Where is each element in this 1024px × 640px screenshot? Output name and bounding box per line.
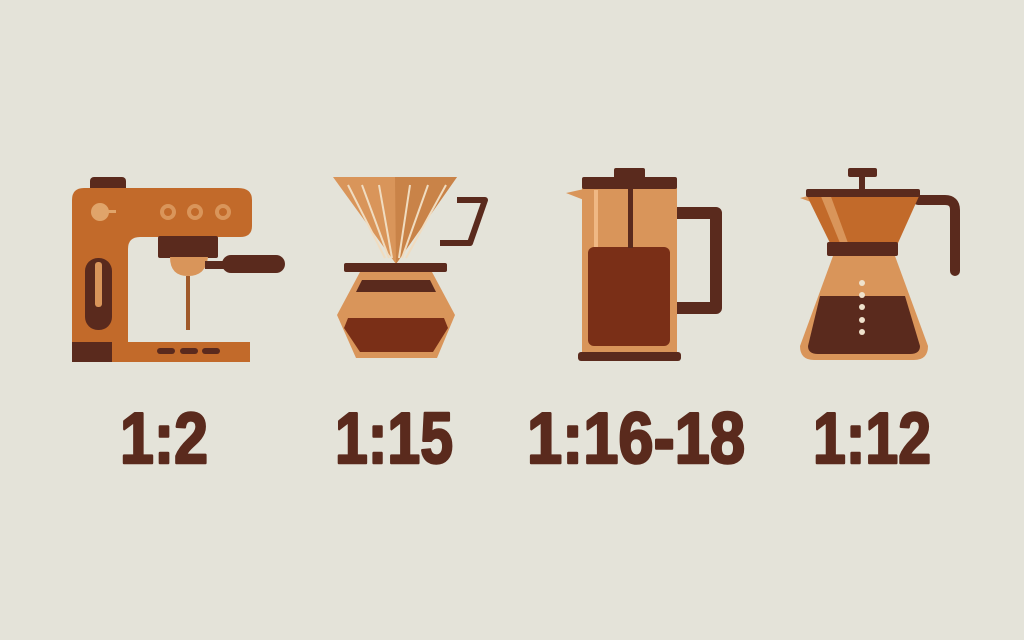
ratio: french press 1:16-18: 1:16-18 — [527, 399, 745, 479]
icon: french press — [566, 168, 716, 361]
icon: chemex pot — [800, 168, 955, 360]
ratio: espresso 1:2: 1:2 — [120, 399, 208, 479]
icon: pour over — [333, 177, 485, 358]
ratio: chemex 1:12: 1:12 — [813, 399, 931, 479]
icon: espresso machine — [72, 177, 285, 362]
ratio: pour over 1:15: 1:15 — [335, 399, 453, 479]
